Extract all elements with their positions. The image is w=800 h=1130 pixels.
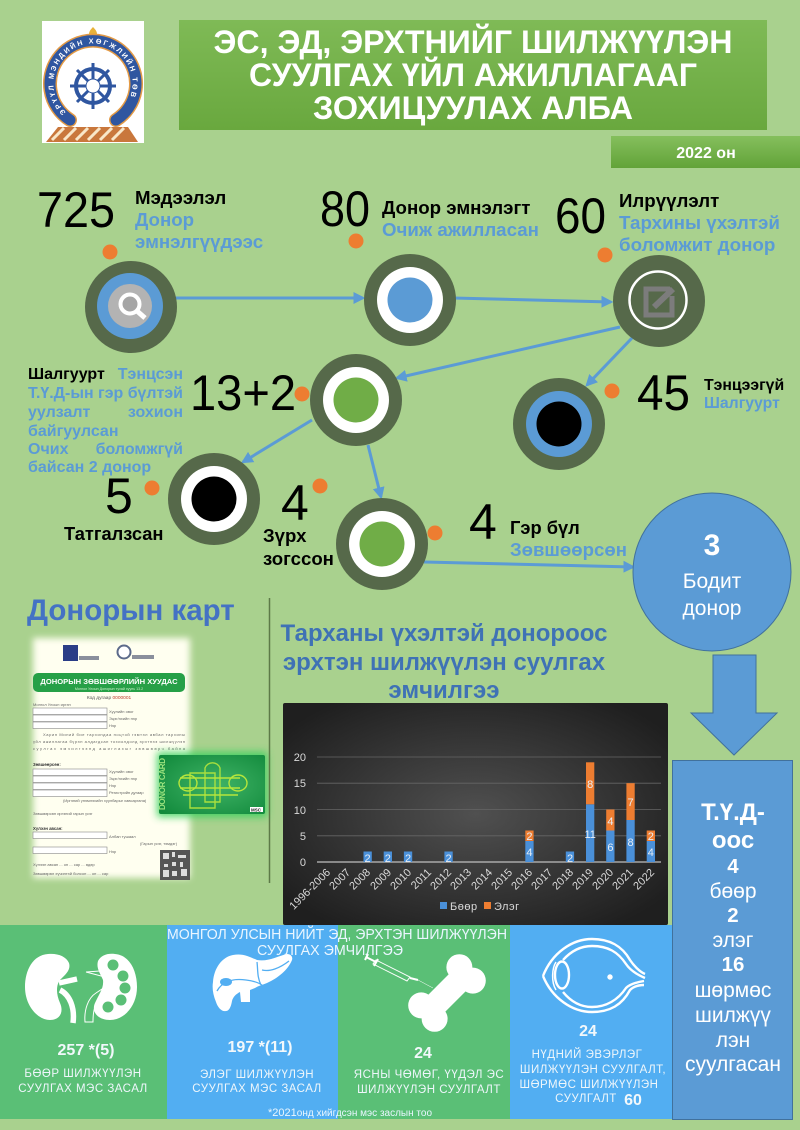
heading: transplant treatment chart: эрхтэн шилжүүлэн суулгах xyxy=(283,649,606,676)
step: 13+2 eligible donors: зохион xyxy=(128,404,183,421)
panel: transplants from brain-dead donors: шилжүү xyxy=(695,1004,771,1027)
divider xyxy=(268,598,270,883)
data labels: 2 xyxy=(567,853,573,865)
panel: cornea and tendon transplant: 60 xyxy=(624,1092,642,1109)
data labels: 6 xyxy=(607,842,613,854)
year axis labels: 2019 xyxy=(570,867,596,892)
logo: health development center emblem: ЭРҮҮЛ МЭНДИЙН ХӨГЖЛИЙН ТӨВ xyxy=(48,38,138,115)
form content: (Иргэний үнэмлэхийн хуулбарыг хавсаргана) xyxy=(63,798,147,803)
form content: Хуулийн овог xyxy=(109,769,134,774)
form content: Монгол Улсын Донорын тухай хууль 13.2 xyxy=(75,687,143,691)
step: 45 not eligible: Тэнцээгүй xyxy=(704,377,784,394)
form content: Эцэг/эхийн нэр xyxy=(109,776,138,781)
bar chart: kidney and liver transplants by year xyxy=(283,703,668,925)
year axis labels: 2012 xyxy=(428,867,454,892)
step: 5 refused xyxy=(64,453,260,545)
form content: Хүлээн авсан ... он ... сар ... өдөр xyxy=(33,862,95,867)
step: 45 not eligible: 45 xyxy=(637,365,690,421)
form content: Нэр xyxy=(109,783,117,788)
panel: transplants from brain-dead donors: 16 xyxy=(722,953,744,976)
data labels: 8 xyxy=(628,837,634,849)
data labels: 2 xyxy=(648,831,654,843)
panel: bone marrow transplant xyxy=(338,925,510,1119)
year axis labels: 1996-2006 xyxy=(287,867,333,912)
chart legend: Бөөр xyxy=(450,901,478,913)
year axis labels: 2022 xyxy=(631,867,657,892)
step: 80 donor hospital visits xyxy=(320,181,539,346)
green donor card xyxy=(158,755,265,814)
panel: transplants from brain-dead donors: бөөр xyxy=(709,880,757,903)
data labels: 7 xyxy=(628,797,634,809)
heading: national totals: МОНГОЛ УЛСЫН НИЙТ ЭД, ЭРХТЭН ШИЛЖҮҮЛЭН xyxy=(167,925,507,943)
icon: kidneys xyxy=(25,954,137,1023)
step: 725 information: Донор xyxy=(135,209,194,230)
circle: 3 actual donors: 3 xyxy=(704,529,720,562)
form content: Хуулийн овог xyxy=(109,709,134,714)
step: 60 identified: Тархины үхэлтэй xyxy=(619,212,780,233)
step: 5 refused: 5 xyxy=(105,468,133,524)
panel: bone marrow transplant: 24 xyxy=(414,1045,432,1062)
step: 60 identified: боломжит донор xyxy=(619,234,775,255)
circle: 3 actual donors: Бодит xyxy=(683,570,742,593)
icon: eye xyxy=(543,939,645,1012)
panel: cornea and tendon transplant: ШИЛЖҮҮЛЭН СУУЛГАЛТ, xyxy=(520,1064,666,1076)
liver bars xyxy=(525,762,655,841)
panel: liver transplant: 197 *(11) xyxy=(228,1039,292,1056)
year badge xyxy=(611,136,800,168)
icon: liver xyxy=(213,954,292,1011)
step: 4 family consent: Зөвшөөрсөн xyxy=(510,539,627,560)
year axis labels: 2015 xyxy=(489,867,515,892)
step: 4 cardiac arrest: 4 xyxy=(281,475,309,531)
panel: kidney transplant: БӨӨР ШИЛЖҮҮЛЭН xyxy=(24,1068,142,1080)
heading: donor card: Донорын карт xyxy=(27,594,235,627)
panel: liver transplant: СУУЛГАХ МЭС ЗАСАЛ xyxy=(192,1083,322,1095)
flow arrows xyxy=(175,298,633,567)
year axis labels: 2016 xyxy=(509,867,535,892)
form content: Монгол Улсын иргэн xyxy=(33,702,71,707)
panel: transplants from brain-dead donors: Т.Ү.Д- xyxy=(701,799,765,826)
step: 5 refused: Татгалзсан xyxy=(64,523,163,544)
step: 725 information: эмнэлгүүдээс xyxy=(135,231,263,252)
step: 725 information: Мэдээлэл xyxy=(135,187,226,208)
step: 13+2 eligible donors: боломжгүй xyxy=(96,441,183,458)
logo: health development center emblem xyxy=(42,21,144,143)
panel: bone marrow transplant: ШИЛЖҮҮЛЭН СУУЛГАЛТ xyxy=(357,1084,501,1096)
title banner: ЭС, ЭД, ЭРХТНИЙГ ШИЛЖҮҮЛЭН xyxy=(214,24,732,60)
step: 13+2 eligible donors: Т.Ү.Д-ын гэр бүлтэй xyxy=(28,385,183,402)
year axis labels: 2009 xyxy=(368,867,394,892)
year axis labels: 2017 xyxy=(529,867,555,892)
panel: liver transplant: ЭЛЭГ ШИЛЖҮҮЛЭН xyxy=(200,1069,314,1081)
step: 13+2 eligible donors: 13+2 xyxy=(190,365,296,421)
step: 13+2 eligible donors: Шалгуурт xyxy=(28,366,105,383)
panel: transplants from brain-dead donors: элэг xyxy=(713,929,754,952)
step: 4 family consent xyxy=(428,494,627,560)
data labels: 2 xyxy=(365,853,371,865)
panel: transplants from brain-dead donors: оос xyxy=(712,827,754,854)
step: 80 donor hospital visits: 80 xyxy=(320,181,370,237)
heading: transplant treatment chart: эмчилгээ xyxy=(388,677,500,704)
panel: cornea and tendon transplant: НҮДНИЙ ЭВЭРЛЭГ xyxy=(532,1048,643,1061)
circle: 3 actual donors: донор xyxy=(683,597,741,620)
chart legend: Элэг xyxy=(494,901,520,913)
step: 4 cardiac arrest xyxy=(263,475,428,590)
data labels: 8 xyxy=(587,779,593,791)
panel: transplants from brain-dead donors: шөрмөс xyxy=(695,979,771,1002)
green donor card: DONOR CARD xyxy=(158,758,167,810)
panel: transplants from brain-dead donors: суулгасан xyxy=(685,1053,781,1076)
heading: national totals xyxy=(167,925,507,959)
year axis labels: 2010 xyxy=(388,867,414,892)
form content: Нэр xyxy=(109,849,117,854)
footnote: *2021онд хийгдсэн мэс заслын тоо xyxy=(268,1107,432,1119)
step: 60 identified: 60 xyxy=(555,188,606,244)
step: 4 family consent: Гэр бүл xyxy=(510,517,580,538)
year axis labels: 2021 xyxy=(610,867,636,892)
step: 60 identified: Илрүүлэлт xyxy=(619,190,719,211)
panel: cornea and tendon transplant: ШӨРМӨС ШИЛЖҮҮЛЭН xyxy=(520,1079,658,1091)
data labels: 11 xyxy=(584,829,596,841)
panel: kidney transplant: 257 *(5) xyxy=(58,1042,114,1059)
title banner xyxy=(179,20,767,130)
step: 725 information: 725 xyxy=(37,182,115,238)
step: 80 donor hospital visits: Донор эмнэлэгт xyxy=(382,197,530,218)
heading: national totals: СУУЛГАХ ЭМЧИЛГЭЭ xyxy=(257,942,403,959)
form content: Эцэг/эхийн нэр xyxy=(109,716,138,721)
chart legend xyxy=(440,901,520,913)
panel: bone marrow transplant: ЯСНЫ ЧӨМӨГ, ҮҮДЭЛ ЭС xyxy=(354,1069,504,1081)
data labels: 4 xyxy=(648,847,654,859)
data labels: 2 xyxy=(385,853,391,865)
panel: cornea and tendon transplant xyxy=(510,925,673,1119)
step: 80 donor hospital visits: Очиж ажилласан xyxy=(382,219,539,240)
donor consent form and card xyxy=(33,638,267,880)
green donor card: MSC xyxy=(251,808,262,812)
panel: cornea and tendon transplant: 24 xyxy=(579,1023,597,1040)
form content: Албан тушаал xyxy=(109,834,136,839)
data labels: 2 xyxy=(526,831,532,843)
step: 45 not eligible xyxy=(513,365,784,470)
title banner: СУУЛГАХ ҮЙЛ АЖИЛЛАГААГ xyxy=(249,57,697,93)
form content: Код дугаар 0000001 xyxy=(87,695,131,701)
arrow: down to transplant panel xyxy=(691,655,777,755)
year axis labels: 2007 xyxy=(327,867,353,892)
circle: 3 actual donors xyxy=(633,493,791,651)
heading: transplant treatment chart: Тарханы үхэлтэй донороос xyxy=(281,620,607,647)
panel: transplants from brain-dead donors: 2 xyxy=(727,904,739,927)
form content xyxy=(33,645,190,880)
year axis labels: 2013 xyxy=(448,867,474,892)
form content: Зөвшөөрсөн: xyxy=(33,762,61,767)
form content: Харин Миний бие тархиндаа ноцтой гэмтэл авбал тархины xyxy=(43,732,185,737)
year badge: 2022 он xyxy=(676,145,736,162)
panel: transplants from brain-dead donors: 4 xyxy=(727,855,739,878)
bar chart: kidney and liver transplants by year: 15 xyxy=(294,778,306,790)
step: 4 family consent: 4 xyxy=(469,494,497,550)
panel: kidney transplant: СУУЛГАХ МЭС ЗАСАЛ xyxy=(18,1083,148,1095)
step: 13+2 eligible donors: байгуулсан xyxy=(28,423,118,440)
year axis labels xyxy=(287,867,657,912)
form content: Зөвшөөрөл хүчинтэй болсон ... он ... сар xyxy=(33,871,109,876)
panel: transplants from brain-dead donors xyxy=(672,760,792,1120)
form content: Зөвшөөрсөн иргэний гарын үсэг xyxy=(33,811,93,816)
title banner: ЗОХИЦУУЛАХ АЛБА xyxy=(313,90,633,126)
kidney bars xyxy=(364,804,655,862)
icon: syringe and bone xyxy=(365,949,491,1037)
form content: үйл ажиллагаа бүрэн алдагдсан тохиолдолд эрхтнээ шилжүүлэн xyxy=(33,739,185,744)
data labels: 2 xyxy=(445,853,452,865)
panel: cornea and tendon transplant: СУУЛГАЛТ xyxy=(555,1093,617,1105)
step: 13+2 eligible donors xyxy=(28,354,402,476)
step: 725 information xyxy=(37,182,263,353)
form content: суулгах эмчилгээнд ашиглахыг зөвшөөрч байна xyxy=(33,746,186,751)
step: 4 cardiac arrest: Зүрх xyxy=(263,525,307,546)
form content: Нэр xyxy=(109,723,117,728)
step: 13+2 eligible donors: уулзалт xyxy=(28,404,91,421)
bar chart: kidney and liver transplants by year: 0 xyxy=(300,857,306,869)
step: 13+2 eligible donors: байсан 2 донор xyxy=(28,459,151,476)
panel: liver transplant xyxy=(167,925,338,1119)
bar chart: kidney and liver transplants by year: 20 xyxy=(294,752,306,764)
year axis labels: 2011 xyxy=(409,867,434,892)
panel: kidney transplant xyxy=(0,925,167,1119)
data labels: 4 xyxy=(607,816,613,828)
heading: transplant treatment chart xyxy=(281,620,607,704)
data labels: 2 xyxy=(405,853,411,865)
step: 45 not eligible: Шалгуурт xyxy=(704,395,780,412)
data labels xyxy=(365,779,654,865)
step: 13+2 eligible donors: Очих xyxy=(28,441,69,458)
form content: Хүлээн авсан: xyxy=(33,826,63,831)
step: 13+2 eligible donors: Тэнцсэн xyxy=(118,366,183,383)
data labels: 4 xyxy=(526,847,532,859)
step: 4 cardiac arrest: зогссон xyxy=(263,548,334,569)
form content: (Гарын үсэг, тэмдэг) xyxy=(140,841,178,846)
bar chart: kidney and liver transplants by year: 5 xyxy=(300,831,306,843)
form content: Регистрийн дугаар xyxy=(109,790,144,795)
year axis labels: 2018 xyxy=(550,867,576,892)
panel: transplants from brain-dead donors: лэн xyxy=(716,1029,750,1052)
year axis labels: 2008 xyxy=(347,867,373,892)
form content: ДОНОРЫН ЗӨВШӨӨРЛИЙН ХУУДАС xyxy=(40,677,178,686)
year axis labels: 2014 xyxy=(469,867,495,892)
year axis labels: 2020 xyxy=(590,867,616,892)
bar chart: kidney and liver transplants by year: 10 xyxy=(294,805,306,817)
step: 60 identified xyxy=(555,188,780,347)
